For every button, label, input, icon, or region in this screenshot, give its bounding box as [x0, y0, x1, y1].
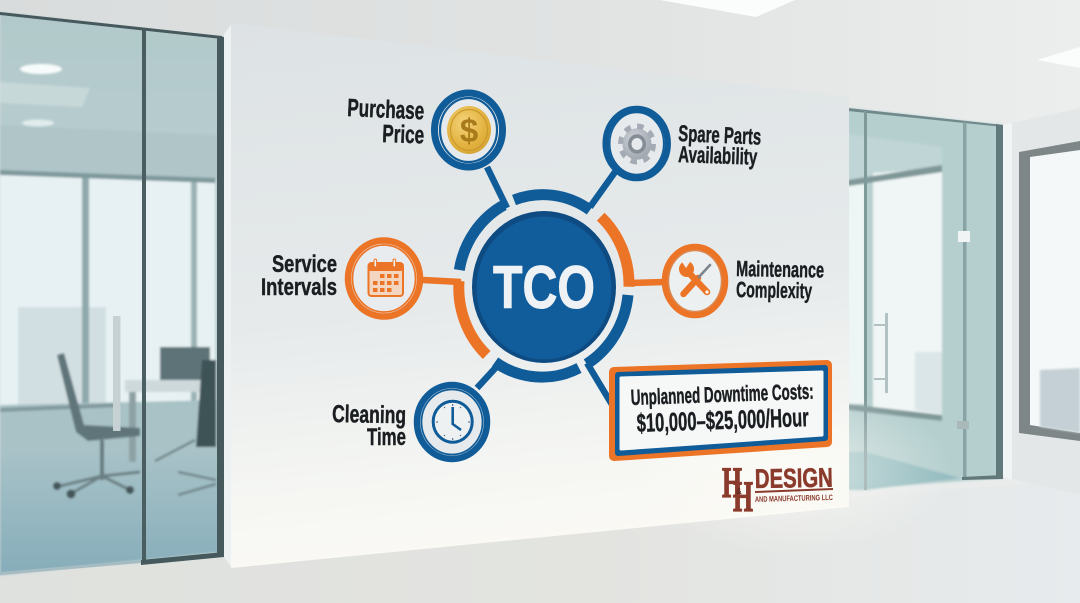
label: spare parts availability: [678, 120, 762, 170]
label: maintenance complexity: Complexity: [736, 277, 813, 303]
node: spare parts availability: [606, 109, 762, 178]
node ring: [348, 240, 420, 316]
label: cleaning time: Time: [367, 424, 406, 451]
node: purchase price: [347, 93, 502, 167]
callout text: Unplanned Downtime Costs:: [630, 379, 814, 410]
label: purchase price: [347, 94, 425, 149]
hub title: TCO: [493, 254, 595, 321]
right side wall and window: [1003, 108, 1080, 495]
label: service intervals: Service: [272, 251, 337, 278]
callout text: [630, 379, 814, 438]
node: cleaning time: [332, 385, 487, 459]
hub outer ring segments: [459, 195, 629, 377]
icon: gear: [620, 126, 654, 162]
node ring: [665, 247, 725, 315]
icon: calendar: [368, 259, 403, 296]
hub circle: [472, 211, 616, 363]
left glass room: [0, 12, 222, 575]
logo: H&H Design and Manufacturing LLC: [722, 460, 833, 521]
icon: gold coin: $: [460, 112, 478, 149]
node ring: [417, 385, 487, 459]
node: service intervals: [261, 240, 420, 316]
TCO hub: [459, 195, 629, 377]
label: maintenance complexity: [736, 256, 824, 303]
icon: wrench and screwdriver: [679, 259, 710, 294]
icon: gold coin: [447, 106, 491, 154]
logo: H&H Design and Manufacturing LLC: &: [736, 487, 742, 496]
logo: H&H Design and Manufacturing LLC: H: [733, 474, 753, 521]
node ring: [434, 93, 502, 167]
icon: clock: [433, 401, 472, 442]
label: service intervals: Intervals: [261, 274, 337, 301]
right glass room: [848, 108, 1003, 490]
node: maintenance complexity: [665, 247, 824, 315]
label: purchase price: Price: [382, 120, 425, 149]
wall panel: [231, 23, 950, 568]
label: cleaning time: Cleaning: [332, 401, 406, 429]
label: spare parts availability: Availability: [678, 141, 758, 170]
logo: H&H Design and Manufacturing LLC: H: [722, 460, 742, 507]
logo: H&H Design and Manufacturing LLC: DESIGN: [755, 463, 833, 494]
logo: H&H Design and Manufacturing LLC: AND MANUFACTURING LLC: [755, 493, 833, 504]
callout: unplanned downtime costs: [614, 365, 827, 456]
connector lines: [423, 167, 664, 408]
callout text: $10,000–$25,000/Hour: [636, 402, 809, 438]
label: maintenance complexity: Maintenance: [736, 256, 824, 283]
node ring: [606, 109, 668, 178]
label: spare parts availability: Spare Parts: [678, 120, 762, 150]
label: service intervals: [261, 251, 337, 301]
label: purchase price: Purchase: [347, 94, 425, 125]
label: cleaning time: [332, 401, 406, 451]
